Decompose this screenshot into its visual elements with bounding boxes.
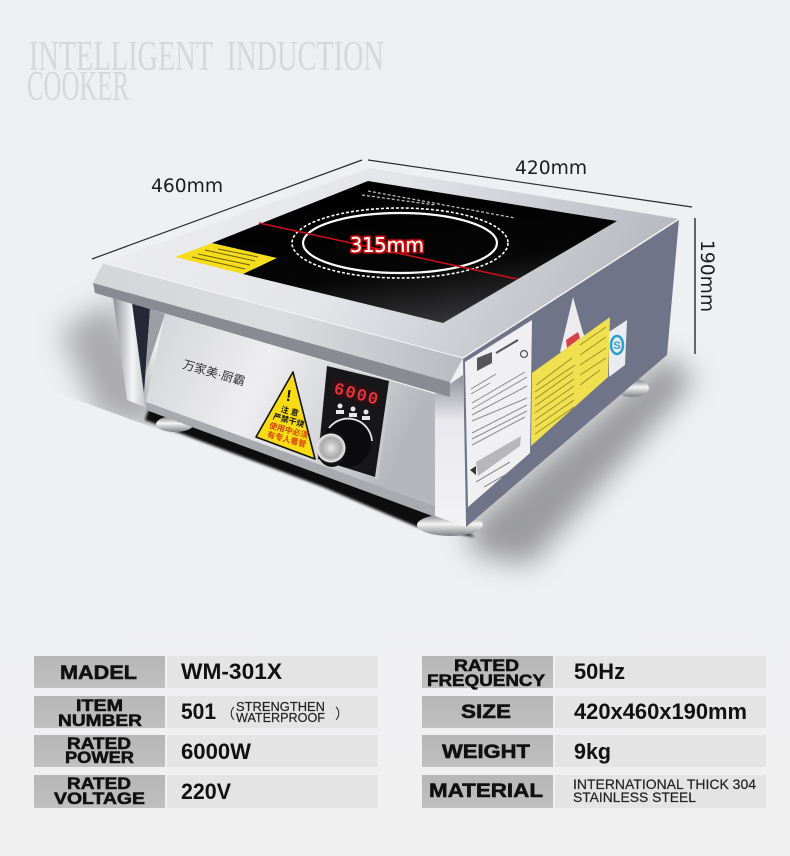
row: material: INTERNATIONAL THICK 304 bbox=[573, 776, 756, 792]
induction cooker bbox=[93, 168, 679, 536]
front panel bbox=[146, 314, 435, 506]
LED display: 6000 bbox=[331, 380, 380, 410]
dimension: width 420mm: 420mm bbox=[515, 158, 587, 179]
row: rated frequency: 50Hz bbox=[574, 659, 625, 684]
sticker: blue safety mark bbox=[609, 320, 627, 377]
row: weight bbox=[422, 735, 766, 767]
sticker: nameplate bbox=[465, 320, 532, 507]
specification table: left column bbox=[34, 656, 378, 808]
row: model bbox=[34, 656, 378, 688]
specification table: right column bbox=[422, 656, 766, 808]
sticker: yellow instructions bbox=[531, 317, 610, 446]
row: weight: 9kg bbox=[574, 739, 611, 764]
row: rated power: POWER bbox=[65, 748, 134, 767]
sticker: blue safety mark: S bbox=[613, 340, 621, 352]
row: material: STAINLESS STEEL bbox=[573, 789, 696, 805]
row: item number: （ bbox=[221, 706, 235, 722]
left leg bbox=[113, 298, 165, 407]
row: item number: 501 bbox=[181, 699, 216, 724]
dimension: depth 460mm bbox=[92, 160, 362, 259]
control knob bbox=[316, 419, 372, 467]
row: size bbox=[422, 696, 766, 728]
corner post bbox=[435, 375, 466, 527]
dimension: width 420mm bbox=[368, 158, 692, 207]
row: material bbox=[422, 775, 766, 808]
row: rated frequency: FREQUENCY bbox=[427, 671, 546, 690]
row: item number: ） bbox=[335, 706, 349, 722]
dimension: height 190mm bbox=[695, 218, 717, 354]
row: rated power bbox=[34, 734, 378, 767]
foot: left bbox=[156, 416, 194, 432]
side face bbox=[463, 219, 679, 527]
warning triangle sticker: ! bbox=[285, 388, 292, 405]
indicator lights bbox=[336, 404, 370, 420]
warning triangle sticker: 注 意 bbox=[280, 404, 300, 418]
diameter line bbox=[259, 223, 517, 279]
sticker: warning triangle bbox=[560, 297, 590, 352]
front bottom lip bbox=[146, 402, 435, 517]
row: item number: ITEM bbox=[76, 696, 123, 715]
warning triangle sticker: 严禁干烧 bbox=[272, 411, 306, 429]
row: rated voltage bbox=[34, 774, 378, 808]
row: size: 420x460x190mm bbox=[574, 699, 747, 724]
row: rated voltage: VOLTAGE bbox=[54, 789, 145, 808]
diameter label: 315mm bbox=[350, 233, 424, 257]
printed brand text on glass bbox=[362, 191, 515, 218]
warning triangle sticker: 使用中必须 bbox=[268, 420, 309, 440]
control panel bbox=[316, 366, 392, 479]
front edge band bbox=[93, 219, 679, 397]
row: size: SIZE bbox=[461, 701, 511, 723]
row: rated voltage: RATED bbox=[67, 774, 131, 793]
row: material: MATERIAL bbox=[429, 780, 543, 802]
warning triangle sticker: 有专人看管 bbox=[266, 429, 307, 449]
row: item number: STRENGTHEN bbox=[236, 699, 325, 714]
foot: front bbox=[417, 514, 483, 536]
row: item number: WATERPROOF bbox=[236, 710, 325, 725]
foot: back right bbox=[615, 379, 649, 397]
row: rated power: RATED bbox=[67, 734, 131, 753]
row: weight: WEIGHT bbox=[442, 741, 530, 763]
row: model: MADEL bbox=[60, 662, 137, 684]
row: item number bbox=[34, 696, 378, 730]
cooker top plate bbox=[103, 168, 679, 358]
title bbox=[27, 34, 384, 110]
row: rated frequency: RATED bbox=[454, 656, 519, 675]
warning label on glass bbox=[175, 243, 277, 274]
dimension: depth 460mm: 460mm bbox=[151, 176, 223, 197]
title: INTELLIGENT INDUCTION bbox=[29, 34, 384, 80]
floor shadows bbox=[60, 300, 695, 565]
row: model: WM-301X bbox=[181, 659, 282, 684]
row: rated voltage: 220V bbox=[181, 779, 231, 804]
title: COOKER bbox=[27, 64, 129, 110]
heating zone rings bbox=[292, 208, 508, 278]
warning triangle sticker bbox=[256, 372, 315, 459]
row: item number: NUMBER bbox=[58, 711, 142, 730]
row: rated power: 6000W bbox=[181, 739, 251, 764]
dimension: height 190mm: 190mm bbox=[696, 240, 717, 312]
glass cooktop bbox=[212, 181, 617, 323]
brand logo: 万家美·厨霸 bbox=[181, 356, 247, 389]
row: rated frequency bbox=[422, 656, 766, 690]
